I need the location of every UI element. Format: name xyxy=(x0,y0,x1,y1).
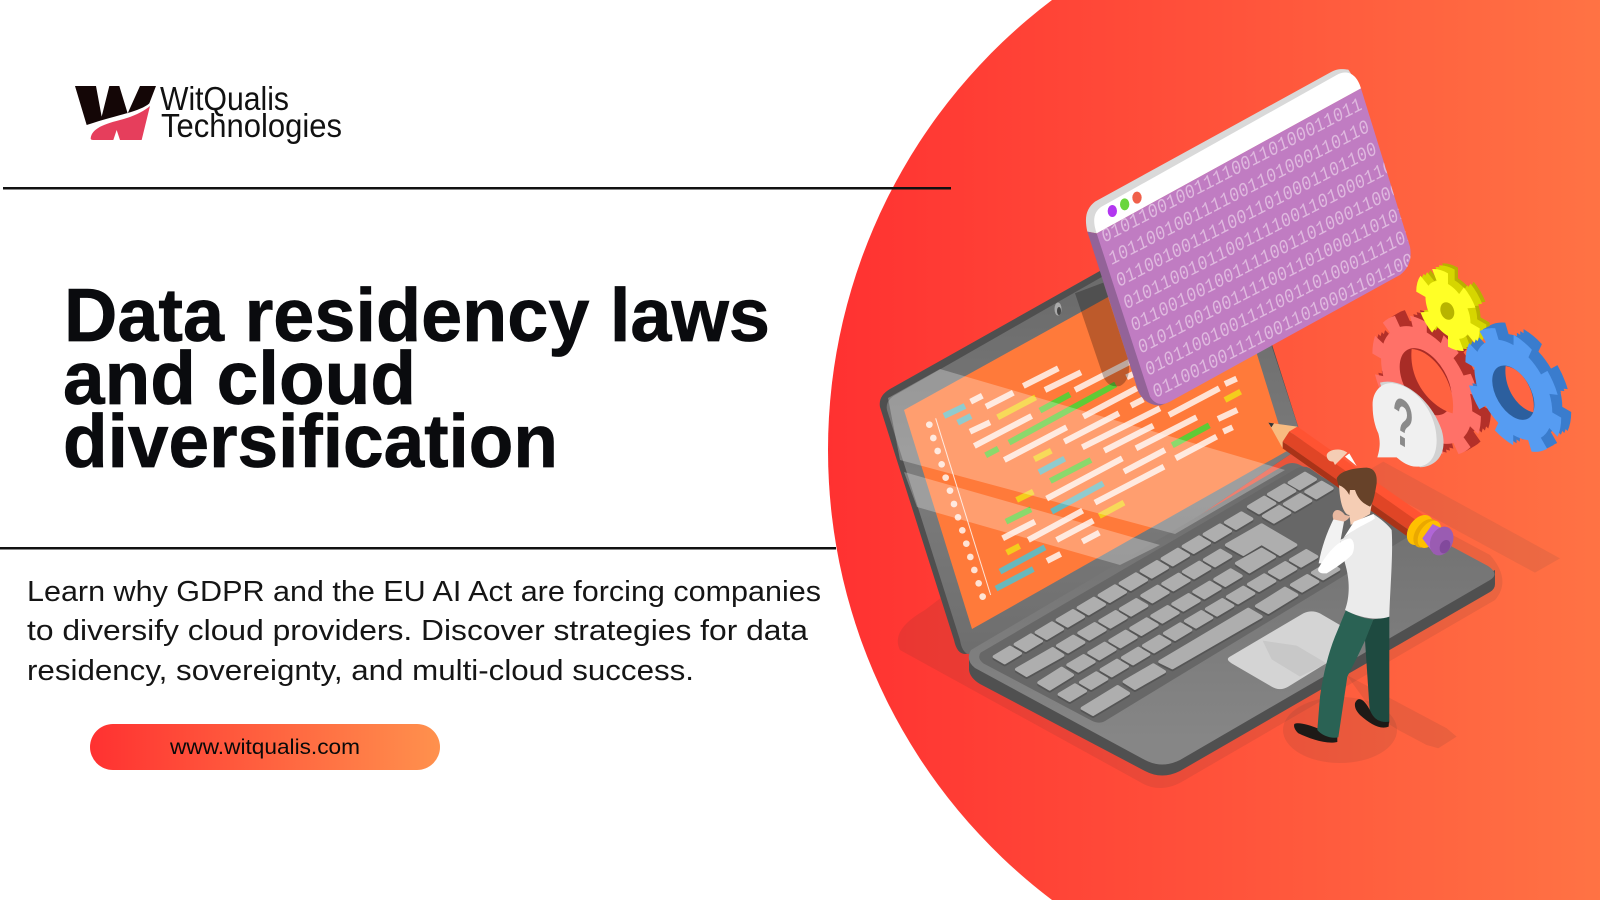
chin hand xyxy=(1333,510,1350,523)
title: Data residency laws xyxy=(64,273,770,357)
pencil middle face xyxy=(1283,431,1417,529)
description: residency, sovereignty, and multi-cloud success. xyxy=(27,655,694,687)
laptop base side xyxy=(969,570,1495,776)
person xyxy=(1294,450,1392,743)
keyboard tray xyxy=(979,467,1408,723)
face and neck xyxy=(1339,485,1375,525)
binary digits in window: 0101100100111100110100011110100 xyxy=(1143,213,1437,382)
laptop screen xyxy=(904,235,1287,629)
window title bar edge xyxy=(1086,69,1361,233)
collar xyxy=(1343,514,1375,538)
laptop base top xyxy=(969,463,1495,764)
red gear xyxy=(1377,294,1486,470)
top divider xyxy=(3,187,951,190)
front shoe xyxy=(1294,723,1337,743)
second divider xyxy=(0,547,836,550)
website button xyxy=(90,724,440,770)
laptop lid bezel xyxy=(887,206,1304,654)
sleeve xyxy=(1319,519,1344,563)
pencil xyxy=(1268,423,1423,536)
shirt xyxy=(1340,514,1392,619)
forearm xyxy=(1318,538,1354,573)
title xyxy=(63,273,770,483)
binary digits in window: 0101100101100111100110100011001 xyxy=(1122,147,1415,316)
binary digits in window: 0101100100111100110100011010110 xyxy=(1136,191,1429,360)
title: diversification xyxy=(63,399,558,483)
eraser xyxy=(1422,523,1458,559)
pencil ferrule and eraser xyxy=(1401,510,1458,559)
logo mark W xyxy=(75,86,156,140)
description: to diversify cloud providers. Discover strategies for data xyxy=(27,615,809,647)
code lines on screen xyxy=(926,362,1241,600)
illustration: laptop xyxy=(880,200,1495,776)
rear shoe xyxy=(1355,699,1389,728)
logo: Technologies xyxy=(161,107,342,144)
raised hand on pencil xyxy=(1327,450,1347,465)
red gradient circle background xyxy=(828,0,1600,900)
screen glare xyxy=(888,369,1285,565)
window body xyxy=(1097,88,1411,404)
blue gear xyxy=(1471,310,1566,464)
window shadow on screen xyxy=(1075,283,1129,386)
gears xyxy=(1373,258,1566,470)
binary digits in window: 0110010011110011010001101100 xyxy=(1114,139,1380,294)
rear trouser leg xyxy=(1365,617,1389,723)
binary digits in window: 0110010011110011010001101100110 xyxy=(1151,235,1444,405)
ferrule xyxy=(1401,510,1446,552)
person ground shadow xyxy=(1283,697,1397,763)
binary digits in window: 1011001001111001101000110110 xyxy=(1107,117,1372,271)
pencil ground shadow xyxy=(1370,462,1560,573)
keyboard xyxy=(979,467,1408,723)
keys xyxy=(994,473,1339,716)
binary digits in window xyxy=(1102,98,1410,397)
window title bar xyxy=(1094,73,1361,233)
logo xyxy=(75,80,342,144)
laptop lid outer edge xyxy=(880,200,1304,654)
title: and cloud xyxy=(63,336,416,420)
pencil upper face xyxy=(1289,427,1423,521)
person cast shadow xyxy=(1347,675,1457,748)
icon: question speech bubble xyxy=(1373,379,1444,467)
icon: question speech bubble: ? xyxy=(1393,379,1414,467)
website button: www.witqualis.com xyxy=(169,735,360,759)
pencil wood tip xyxy=(1268,423,1297,448)
pencil lead xyxy=(1268,423,1274,427)
yellow gear xyxy=(1421,258,1485,356)
floating code window xyxy=(1086,69,1411,406)
laptop ground shadow xyxy=(898,400,1502,788)
window left side xyxy=(1087,232,1170,406)
hair xyxy=(1337,468,1377,507)
description: Learn why GDPR and the EU AI Act are forcing companies xyxy=(27,576,821,608)
touchpad xyxy=(1228,611,1360,689)
window dots xyxy=(1108,192,1142,217)
pencil lower face xyxy=(1283,442,1408,536)
logo text: WitQualis xyxy=(160,80,289,117)
description xyxy=(27,576,821,687)
webcam xyxy=(1054,302,1062,316)
binary digits in window: 0101100100111100110100011011 xyxy=(1100,94,1365,249)
binary digits in window: 0110010010011110011010001100011 xyxy=(1129,169,1422,338)
front trouser leg xyxy=(1317,610,1373,738)
cuff xyxy=(1345,453,1357,466)
